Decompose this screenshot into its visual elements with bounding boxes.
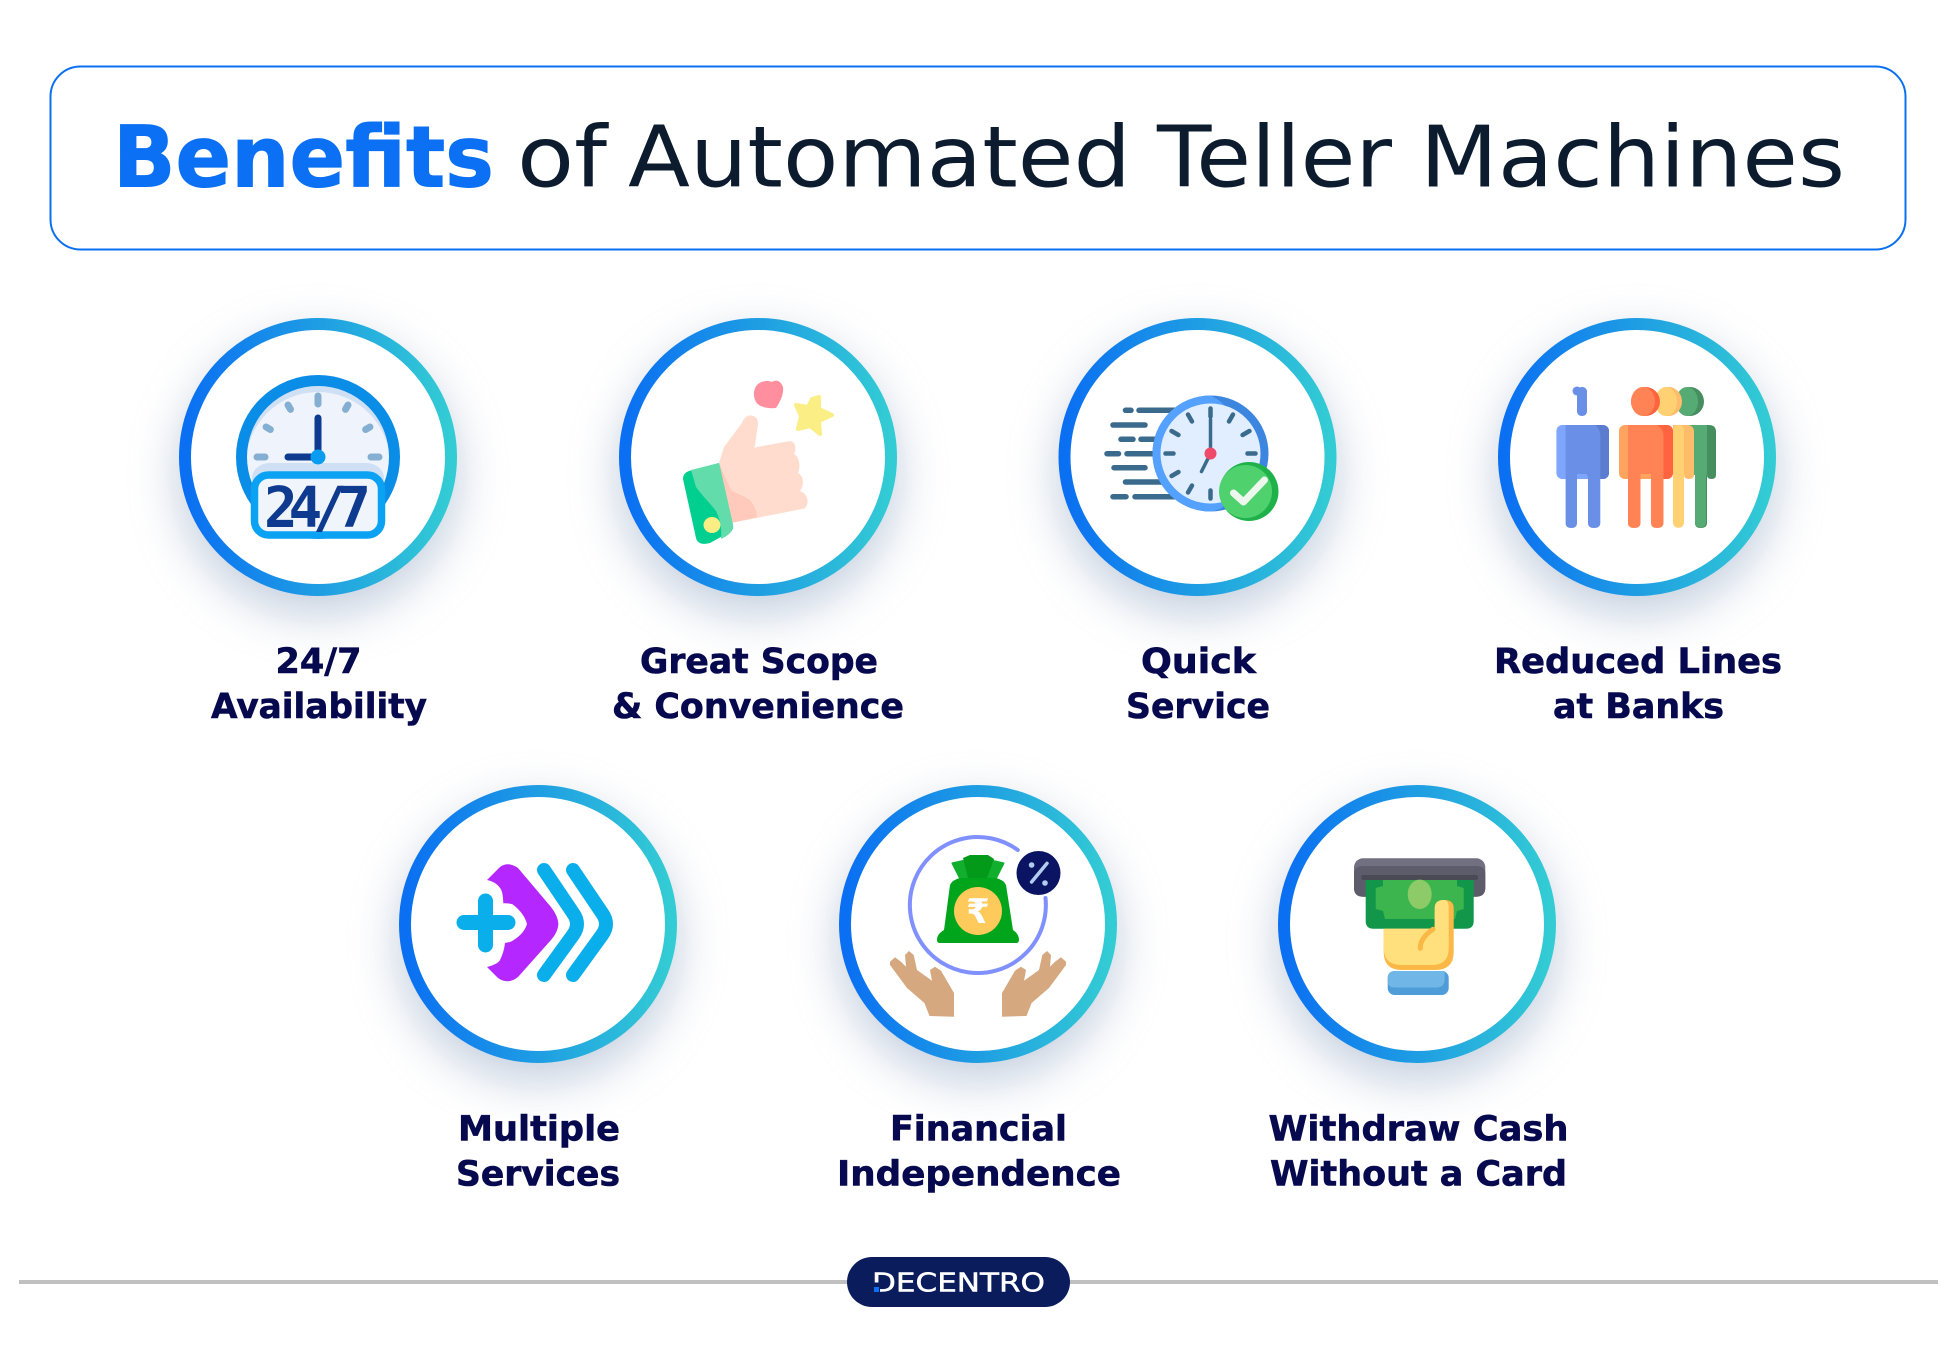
title: Benefits of Automated Teller Machines: of (517, 108, 609, 208)
logo pill: DECENTRO: DECENTRO (872, 1268, 1045, 1298)
label: Reduced Lines at Banks: Reduced Lines (1494, 642, 1782, 682)
title panel (50, 66, 1906, 250)
label: Withdraw Cash Without a Card (1268, 1110, 1568, 1194)
blue person (1556, 386, 1609, 528)
label: Great Scope & Convenience: Great Scope (640, 642, 878, 682)
hands (890, 951, 1066, 1017)
icon: hand taking cash from ATM slot (1354, 858, 1485, 995)
label: 24/7 Availability: 24/7 (276, 642, 362, 682)
label: Withdraw Cash Without a Card: Withdraw Cash (1268, 1110, 1568, 1150)
title: Benefits of Automated Teller Machines: Benefits (113, 108, 494, 208)
label: 24/7 Availability: Availability (211, 687, 427, 727)
title: Benefits of Automated Teller Machines: Automated (628, 108, 1131, 208)
label: Great Scope & Convenience: & Convenience (612, 687, 904, 727)
label: Multiple Services: Multiple (458, 1110, 620, 1150)
label: Quick Service: Service (1126, 687, 1270, 727)
item: 24/7 availability (178, 324, 458, 727)
label: Quick Service: Quick (1141, 642, 1257, 682)
logo pill: DECENTRO (847, 1257, 1070, 1307)
money bag (937, 855, 1019, 943)
item: withdraw cash without a card (1268, 791, 1568, 1194)
icon: people in line (1556, 386, 1716, 528)
label: Financial Independence (837, 1110, 1121, 1194)
icon: money bag in hands (890, 837, 1066, 1017)
title: Benefits of Automated Teller Machines (113, 108, 1845, 208)
label: Withdraw Cash Without a Card: Without a Card (1270, 1154, 1567, 1194)
label: Reduced Lines at Banks: at Banks (1553, 687, 1724, 727)
percent badge (1016, 851, 1060, 895)
item: great scope and convenience (612, 324, 904, 727)
label: 24/7 Availability (211, 642, 427, 727)
item: multiple services (398, 791, 678, 1194)
icon: 24/7 clock: 24/7 (264, 476, 371, 541)
green person (1676, 387, 1716, 528)
item: financial independence (837, 791, 1121, 1194)
item: quick service (1058, 324, 1338, 727)
icon: plus and chevrons (464, 864, 606, 981)
title: Benefits of Automated Teller Machines: Teller (1156, 108, 1392, 208)
orange person (1619, 387, 1673, 528)
label: Financial Independence: Independence (837, 1154, 1121, 1194)
label: Multiple Services (456, 1110, 620, 1194)
yellow person (1655, 387, 1694, 528)
item: reduced lines at banks (1494, 324, 1782, 727)
footer brand line with logo (19, 1257, 1938, 1307)
label: Quick Service (1126, 642, 1270, 727)
title: Benefits of Automated Teller Machines: Machines (1420, 108, 1845, 208)
icon: 24/7 clock (242, 380, 394, 541)
label: Great Scope & Convenience (612, 642, 904, 727)
icon: fast clock with check mark (1107, 396, 1278, 521)
money bag: ₹ (966, 892, 990, 932)
icon: thumbs up with heart and star (683, 381, 832, 544)
label: Reduced Lines at Banks (1494, 642, 1782, 727)
label: Financial Independence: Financial (890, 1110, 1067, 1150)
label: Multiple Services: Services (456, 1154, 620, 1194)
